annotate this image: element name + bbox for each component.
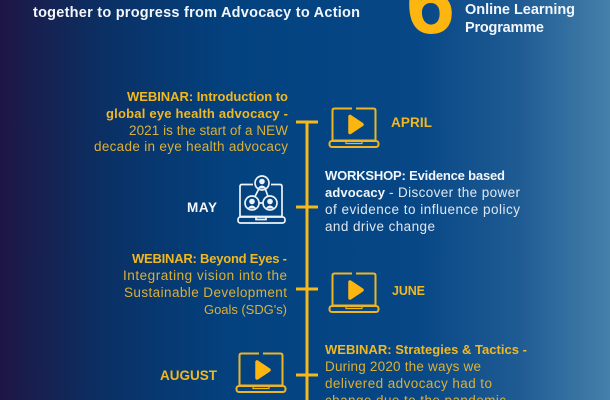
programme label: Programme [465, 20, 544, 36]
text block: webinar beyond eyes: Integrating vision into the [123, 268, 287, 283]
text block: webinar introduction: WEBINAR: Introduction to [127, 89, 288, 104]
heading: top line: together to progress from Advocacy to Action [33, 5, 360, 21]
programme label: Online Learning [465, 2, 575, 18]
text block: workshop: advocacy [325, 185, 386, 200]
text block: workshop: of evidence to influence policy [325, 202, 520, 217]
text block: workshop [325, 168, 520, 234]
text block: webinar introduction [94, 89, 288, 154]
text block: webinar strategies and tactics: WEBINAR: Strategies & Tactics - [325, 342, 527, 357]
month label: August: AUGUST [160, 368, 218, 383]
text block: workshop: - Discover the power [389, 185, 520, 200]
icon: laptop with play, August [236, 354, 286, 392]
icon: laptop with people network, May [238, 176, 285, 223]
text block: webinar beyond eyes: Goals (SDG's) [204, 302, 287, 317]
text block: webinar strategies and tactics: delivered advocacy had to [325, 376, 492, 391]
text block: workshop: and drive change [325, 219, 435, 234]
text block: webinar beyond eyes: WEBINAR: Beyond Eyes - [132, 251, 287, 266]
month label: May: MAY [187, 200, 217, 215]
text block: workshop: WORKSHOP: Evidence based [325, 168, 505, 183]
text block: webinar strategies and tactics: During 2020 the ways we [325, 359, 481, 374]
programme label [465, 2, 575, 36]
icon: laptop with play, April [330, 108, 378, 147]
text block: webinar introduction: global eye health advocacy - [106, 106, 288, 121]
text block: webinar introduction: 2021 is the start of a NEW [129, 123, 288, 138]
text block: webinar introduction: decade in eye health advocacy [94, 139, 288, 154]
timeline [296, 120, 318, 400]
month label: June: JUNE [392, 284, 425, 298]
text block: webinar beyond eyes: Sustainable Development [124, 285, 287, 300]
icon: laptop with play, June [330, 274, 378, 312]
month label: April: APRIL [391, 115, 432, 130]
text block: webinar beyond eyes [123, 251, 287, 317]
text block: webinar strategies and tactics [325, 342, 527, 400]
